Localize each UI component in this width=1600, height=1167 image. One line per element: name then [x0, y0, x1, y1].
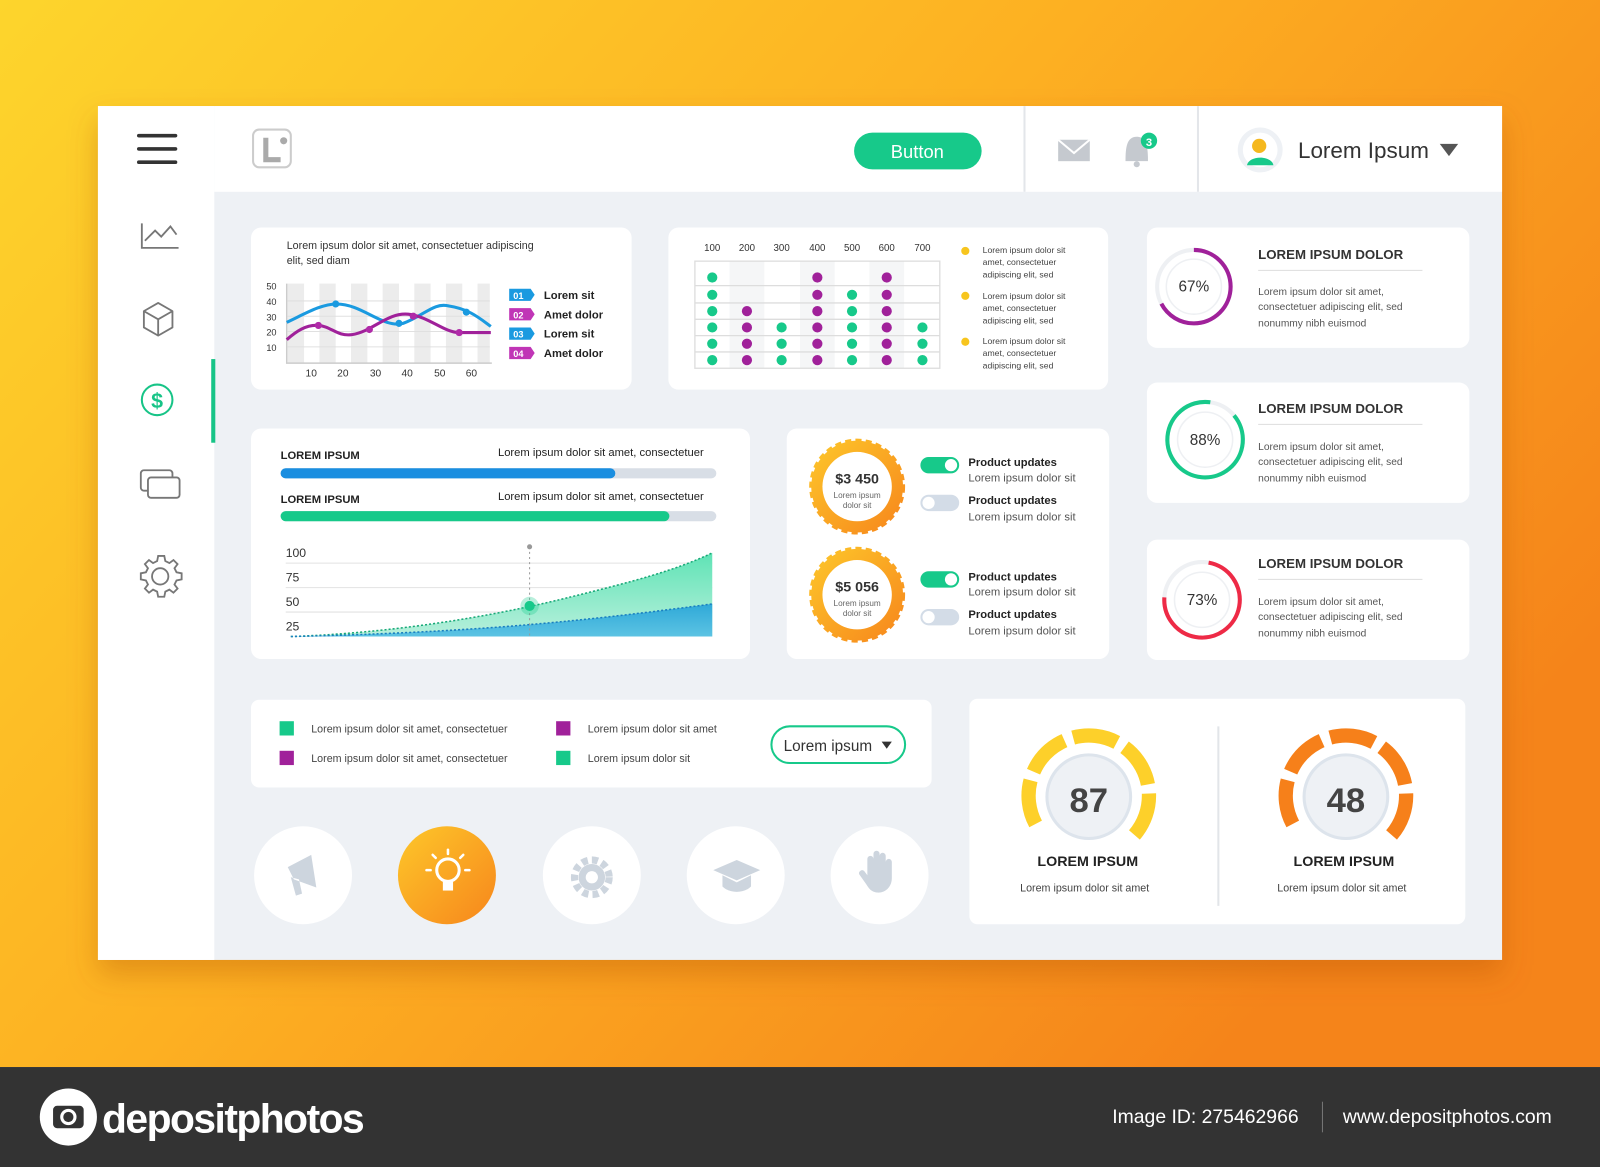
legend: 02	[513, 310, 523, 320]
chart grid: 60	[466, 368, 477, 379]
panel: dot chart: 400	[809, 243, 826, 254]
icon: lightbulb	[398, 826, 496, 924]
dot legend: adipiscing elit, sed	[983, 360, 1054, 370]
icon: dollar	[142, 385, 172, 415]
dashboard frame	[98, 106, 1502, 960]
toggles: Lorem ipsum dolor sit	[968, 511, 1077, 523]
chart grid: 30	[370, 368, 382, 379]
legend: Amet dolor	[544, 309, 604, 321]
toggles: Product updates	[968, 609, 1057, 621]
panel: stat 67: LOREM IPSUM DOLOR	[1258, 247, 1404, 262]
panel: progress and area chart: LOREM IPSUM	[281, 494, 360, 506]
user name: Lorem Ipsum	[1298, 138, 1429, 163]
panel: stat 73: consectetuer adipiscing elit, sed	[1258, 612, 1403, 623]
toggles: Lorem ipsum dolor sit	[968, 626, 1077, 638]
icon: bell	[1126, 133, 1157, 167]
panel: legend and dropdown: Lorem ipsum dolor sit	[588, 753, 690, 765]
chart grid: 10	[266, 343, 277, 353]
panel: stat 67: consectetuer adipiscing elit, sed	[1258, 302, 1403, 313]
panel: progress and area chart: LOREM IPSUM	[281, 450, 360, 462]
icon: settings	[141, 556, 182, 597]
panel: stat 88: Lorem ipsum dolor sit amet,	[1258, 442, 1384, 453]
area chart: 50	[286, 595, 300, 609]
area chart	[286, 544, 712, 637]
icon: dollar: $	[151, 389, 163, 413]
badge 1: Lorem ipsum	[834, 491, 881, 500]
panel: stat 67: nonummy nibh euismod	[1258, 318, 1367, 329]
panel: dot chart: 200	[739, 243, 756, 254]
panel: dot chart: 600	[879, 243, 895, 254]
footer logo	[40, 1088, 364, 1146]
panel: legend and dropdown: Lorem ipsum dolor sit amet, consectetuer	[311, 723, 508, 735]
panel: stat 88: LOREM IPSUM DOLOR	[1258, 401, 1404, 416]
gauge 48: LOREM IPSUM	[1294, 854, 1394, 870]
panel: stat 73: Lorem ipsum dolor sit amet,	[1258, 597, 1384, 608]
panel: line chart	[251, 227, 632, 390]
dot legend: amet, consectetuer	[983, 348, 1056, 358]
badge 1: dolor sit	[843, 501, 872, 510]
icon: hand	[831, 826, 929, 924]
panel: progress and area chart: Lorem ipsum dolor sit amet, consectetuer	[498, 491, 704, 503]
icon: megaphone	[254, 826, 352, 924]
panel: score gauges	[969, 699, 1465, 924]
toggles: Product updates	[968, 495, 1057, 507]
chart grid: 50	[266, 282, 277, 292]
dot legend: adipiscing elit, sed	[983, 315, 1054, 325]
footer info	[1112, 1102, 1552, 1132]
panel: legend and dropdown	[251, 700, 932, 788]
icon: mail	[1058, 140, 1090, 161]
legend: 01	[513, 291, 523, 301]
panel: legend and dropdown: Lorem ipsum dolor sit amet	[588, 723, 717, 735]
chart grid: 40	[266, 297, 277, 307]
gauge 87: LOREM IPSUM	[1037, 854, 1138, 870]
dot legend: amet, consectetuer	[983, 257, 1056, 267]
chart grid: 10	[306, 368, 317, 379]
badge 2: dolor sit	[843, 609, 872, 618]
panel: line chart: elit, sed diam	[287, 255, 350, 267]
panel: line chart: Lorem ipsum dolor sit amet, consectetuer adipiscing	[287, 240, 534, 252]
panel: stat 88: 88%	[1190, 432, 1221, 449]
area chart: 100	[286, 546, 306, 560]
toggles: Lorem ipsum dolor sit	[968, 472, 1077, 484]
dot legend: Lorem ipsum dolor sit	[983, 336, 1066, 346]
footer info: www.depositphotos.com	[1342, 1106, 1552, 1128]
badge 1	[811, 441, 903, 532]
gauge 48: 48	[1327, 782, 1365, 820]
legend: Amet dolor	[544, 348, 604, 360]
footer bar	[0, 1067, 1600, 1167]
toggles	[920, 457, 1077, 638]
active indicator	[211, 359, 215, 443]
panel: dot chart: 300	[774, 243, 790, 254]
icon: graduation cap	[687, 826, 785, 924]
legend: 04	[513, 349, 524, 359]
footer logo: depositphotos	[102, 1095, 364, 1141]
badge 1: $3 450	[835, 472, 879, 488]
icon: cards	[141, 470, 180, 498]
dot legend: adipiscing elit, sed	[983, 269, 1054, 279]
panel: stat 73: LOREM IPSUM DOLOR	[1258, 556, 1404, 571]
icon: menu	[139, 136, 176, 162]
chart grid: 30	[266, 312, 277, 322]
avatar	[1238, 128, 1283, 172]
icon buttons row	[254, 826, 929, 924]
icon: gear	[543, 826, 641, 924]
panel: dot chart: 700	[914, 243, 931, 254]
panel: progress and area chart: Lorem ipsum dolor sit amet, consectetuer	[498, 447, 704, 459]
gauge 87	[1007, 714, 1170, 895]
legend: 03	[513, 330, 523, 340]
chart grid: 20	[337, 368, 349, 379]
panel: dot chart	[668, 227, 1108, 390]
panel: stat 67	[1147, 227, 1469, 348]
panel: stat 88: nonummy nibh euismod	[1258, 473, 1367, 484]
dropdown: Lorem ipsum	[784, 738, 872, 755]
panel: legend and dropdown: Lorem ipsum dolor sit amet, consectetuer	[311, 753, 508, 765]
gauge 87: Lorem ipsum dolor sit amet	[1020, 883, 1149, 895]
icon: cube	[144, 303, 172, 336]
dot legend: amet, consectetuer	[983, 303, 1056, 313]
top bar	[214, 106, 1502, 192]
panel: stat 67: Lorem ipsum dolor sit amet,	[1258, 287, 1384, 298]
legend: Lorem sit	[544, 290, 595, 302]
badge 2: Lorem ipsum	[834, 599, 881, 608]
button: Button	[891, 141, 944, 162]
panel: dot chart: 100	[704, 243, 721, 254]
footer info: Image ID: 275462966	[1112, 1106, 1299, 1128]
panel: stat 73: nonummy nibh euismod	[1258, 629, 1367, 640]
panel: stat 88: consectetuer adipiscing elit, sed	[1258, 457, 1403, 468]
chart grid	[266, 282, 492, 379]
panel: progress and area chart	[251, 428, 750, 659]
toggles: Product updates	[968, 571, 1057, 583]
toggles: Product updates	[968, 457, 1057, 469]
panel: dot chart: 500	[844, 243, 861, 254]
dot legend	[961, 245, 1066, 370]
chart grid: 20	[266, 328, 277, 338]
gauge 48	[1264, 714, 1427, 895]
area chart: 25	[286, 619, 300, 633]
toggles: Lorem ipsum dolor sit	[968, 587, 1077, 599]
chart grid: 40	[401, 368, 413, 379]
gauge 48: Lorem ipsum dolor sit amet	[1277, 883, 1406, 895]
sidebar	[98, 106, 215, 960]
area chart: 75	[286, 570, 300, 584]
icon: bell: 3	[1146, 137, 1152, 149]
panel: stat 73: 73%	[1187, 592, 1218, 609]
legend	[509, 289, 604, 360]
button	[854, 133, 982, 169]
gauge 87: 87	[1069, 782, 1108, 820]
dot legend: Lorem ipsum dolor sit	[983, 291, 1066, 301]
legend: Lorem sit	[544, 329, 595, 341]
panel: stat 73	[1147, 540, 1469, 660]
icon: chart	[142, 223, 179, 248]
chart grid: 50	[434, 368, 446, 379]
badge 2	[811, 549, 903, 641]
panel: stat 88	[1147, 383, 1469, 503]
dropdown	[771, 726, 905, 763]
badge 2: $5 056	[835, 580, 879, 596]
panel: badges and toggles	[787, 428, 1109, 659]
logo	[253, 130, 291, 167]
panel: stat 67: 67%	[1179, 279, 1210, 296]
dot legend: Lorem ipsum dolor sit	[983, 245, 1066, 255]
